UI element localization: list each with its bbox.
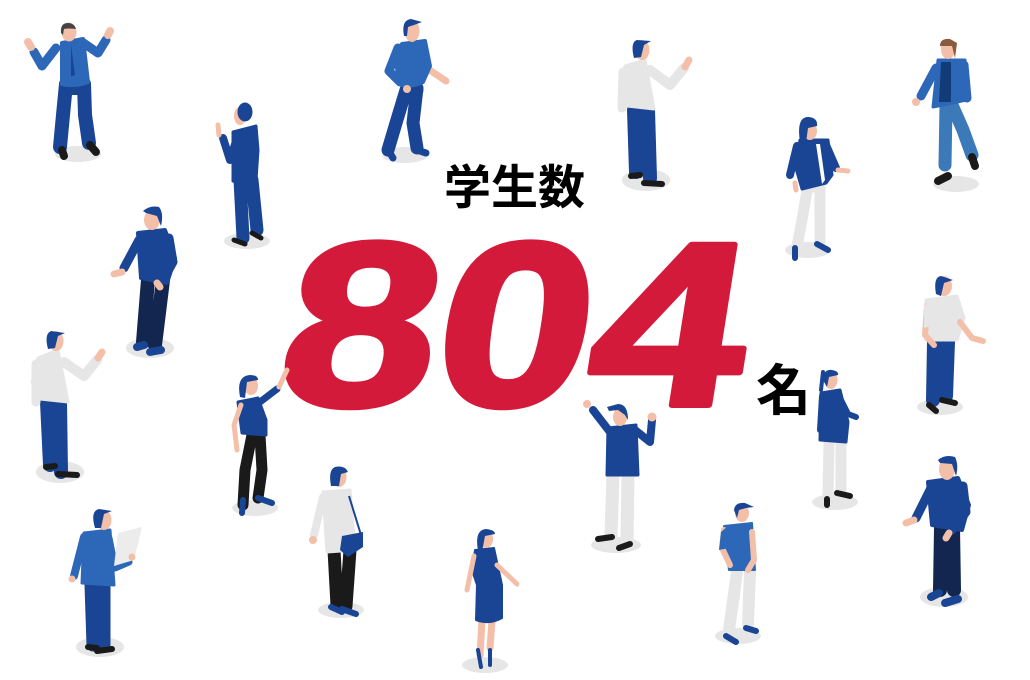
- figure: man in grey shirt pointing, left side: [32, 331, 102, 483]
- figure: woman in blue dress: [462, 529, 517, 673]
- figure: man in jacket and jeans walking: [912, 39, 979, 192]
- heading: number of students label: 学生数: [444, 161, 585, 214]
- figure: man reading a sheet of paper: [68, 509, 142, 657]
- figure: man in dark suit seen from behind: [218, 102, 270, 249]
- big number 804: 804: [265, 194, 771, 455]
- figure: man with tie, arms raised: [28, 22, 110, 162]
- figure: man in cap with both arms raised: [583, 400, 656, 553]
- figure: man in dark sweater and navy trousers: [906, 456, 969, 607]
- figure: man in cap and white trousers: [715, 503, 761, 644]
- figure: woman in blazer and white trousers: [785, 117, 848, 258]
- unit label: 名: [756, 360, 811, 422]
- figure: woman with black leggings touching the number: [232, 370, 287, 516]
- figure: woman with ponytail and white trousers: [812, 370, 858, 510]
- figure: man in navy trousers gesturing: [114, 206, 175, 358]
- figure: man in white shirt with shoulder bag: [309, 467, 364, 618]
- figure: man in blue sweater walking: [382, 19, 446, 163]
- figure: man in white shirt: [917, 276, 983, 415]
- figure: man in grey shirt pointing: [619, 40, 689, 191]
